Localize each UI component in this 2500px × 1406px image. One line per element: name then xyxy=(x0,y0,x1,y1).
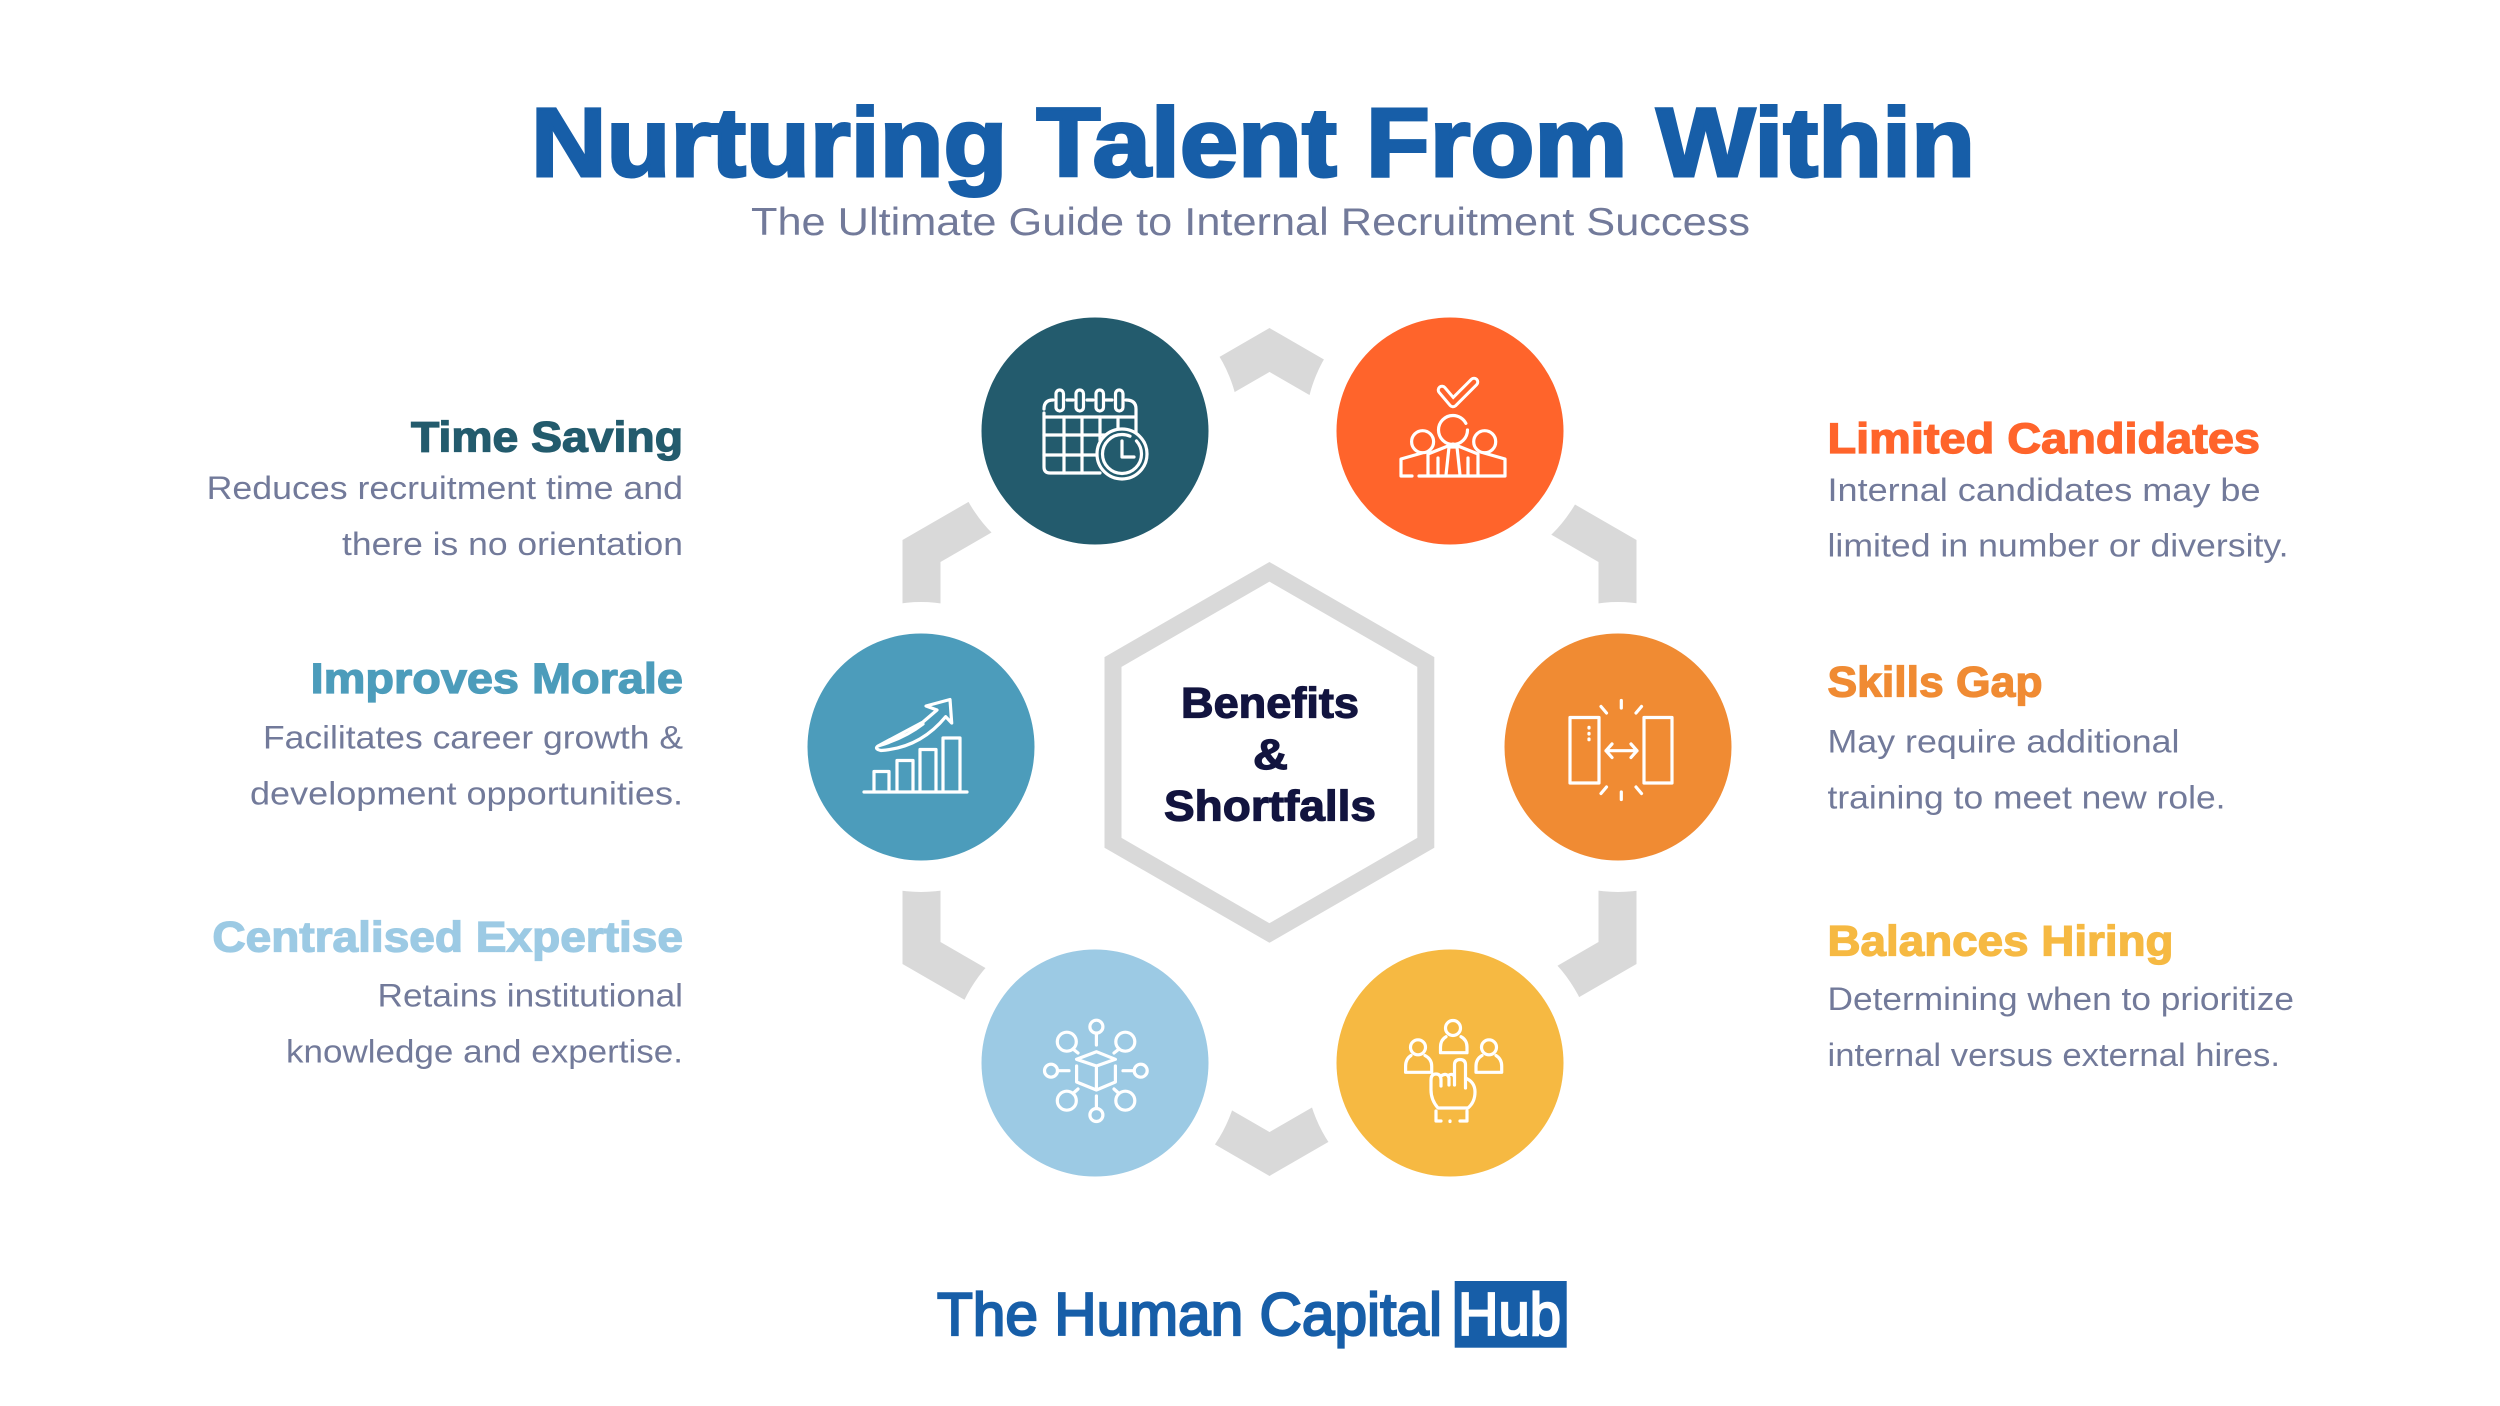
text block: Time Saving xyxy=(207,414,683,562)
text block: Balances Hiring: Balances Hiring xyxy=(1828,918,2174,966)
icon circle: team with check mark xyxy=(1336,318,1564,544)
logo: The Human Capital Hub: The Human Capital xyxy=(937,1281,1442,1348)
text block: Skills Gap: May require additional xyxy=(1828,724,2180,760)
text block: Limited Candidates: Limited Candidates xyxy=(1828,415,2260,463)
icon circle: connected cube network xyxy=(982,950,1208,1176)
icon circle: hand selecting people xyxy=(1336,950,1564,1176)
text block: Limited Candidates xyxy=(1828,415,2288,564)
text block: Limited Candidates: limited in number or diversity. xyxy=(1828,528,2288,564)
central hexagon: Benefits & Shortfalls: & xyxy=(1253,731,1288,779)
icon circle: growth bar chart xyxy=(808,634,1034,860)
text block: Skills Gap: training to meet new role. xyxy=(1828,780,2226,816)
text block: Balances Hiring: Determining when to prioritize xyxy=(1828,981,2294,1017)
central hexagon: Benefits & Shortfalls: Benefits xyxy=(1181,680,1359,728)
text block: Skills Gap xyxy=(1828,659,2226,816)
text block: Improves Morale: Improves Morale xyxy=(311,655,683,703)
central hexagon: Benefits & Shortfalls: Shortfalls xyxy=(1164,782,1376,830)
text block: Improves Morale: Facilitates career growth & xyxy=(263,720,683,756)
icon circle: skills gap, two panels and arrow xyxy=(1504,634,1732,860)
text block: Skills Gap: Skills Gap xyxy=(1828,659,2042,707)
text block: Centralised Expertise xyxy=(212,914,683,1070)
text block: Time Saving: Reduces recruitment time and xyxy=(207,470,683,506)
text block: Centralised Expertise: Centralised Expertise xyxy=(212,914,683,962)
text block: Improves Morale xyxy=(250,655,683,812)
text block: Centralised Expertise: Retains institutional xyxy=(378,978,683,1014)
text block: Limited Candidates: Internal candidates may be xyxy=(1828,472,2260,508)
title: Nurturing Talent From Within xyxy=(531,88,1975,197)
subtitle: The Ultimate Guide to Internal Recruitment Success xyxy=(751,201,1750,244)
text block: Improves Morale: development opportunities. xyxy=(250,776,683,812)
central hexagon: Benefits & Shortfalls xyxy=(1113,572,1426,933)
text block: Time Saving: Time Saving xyxy=(411,414,683,462)
text block: Balances Hiring: internal versus external hires. xyxy=(1828,1037,2280,1073)
text block: Time Saving: there is no orientation xyxy=(342,526,683,562)
logo: The Human Capital Hub: Hub xyxy=(1458,1281,1561,1348)
text block: Centralised Expertise: knowledge and expertise. xyxy=(286,1034,683,1070)
hexagon ring of grey chevron connectors xyxy=(776,286,1763,1208)
text block: Balances Hiring xyxy=(1828,918,2294,1073)
icon circle: calendar and clock xyxy=(982,318,1208,544)
